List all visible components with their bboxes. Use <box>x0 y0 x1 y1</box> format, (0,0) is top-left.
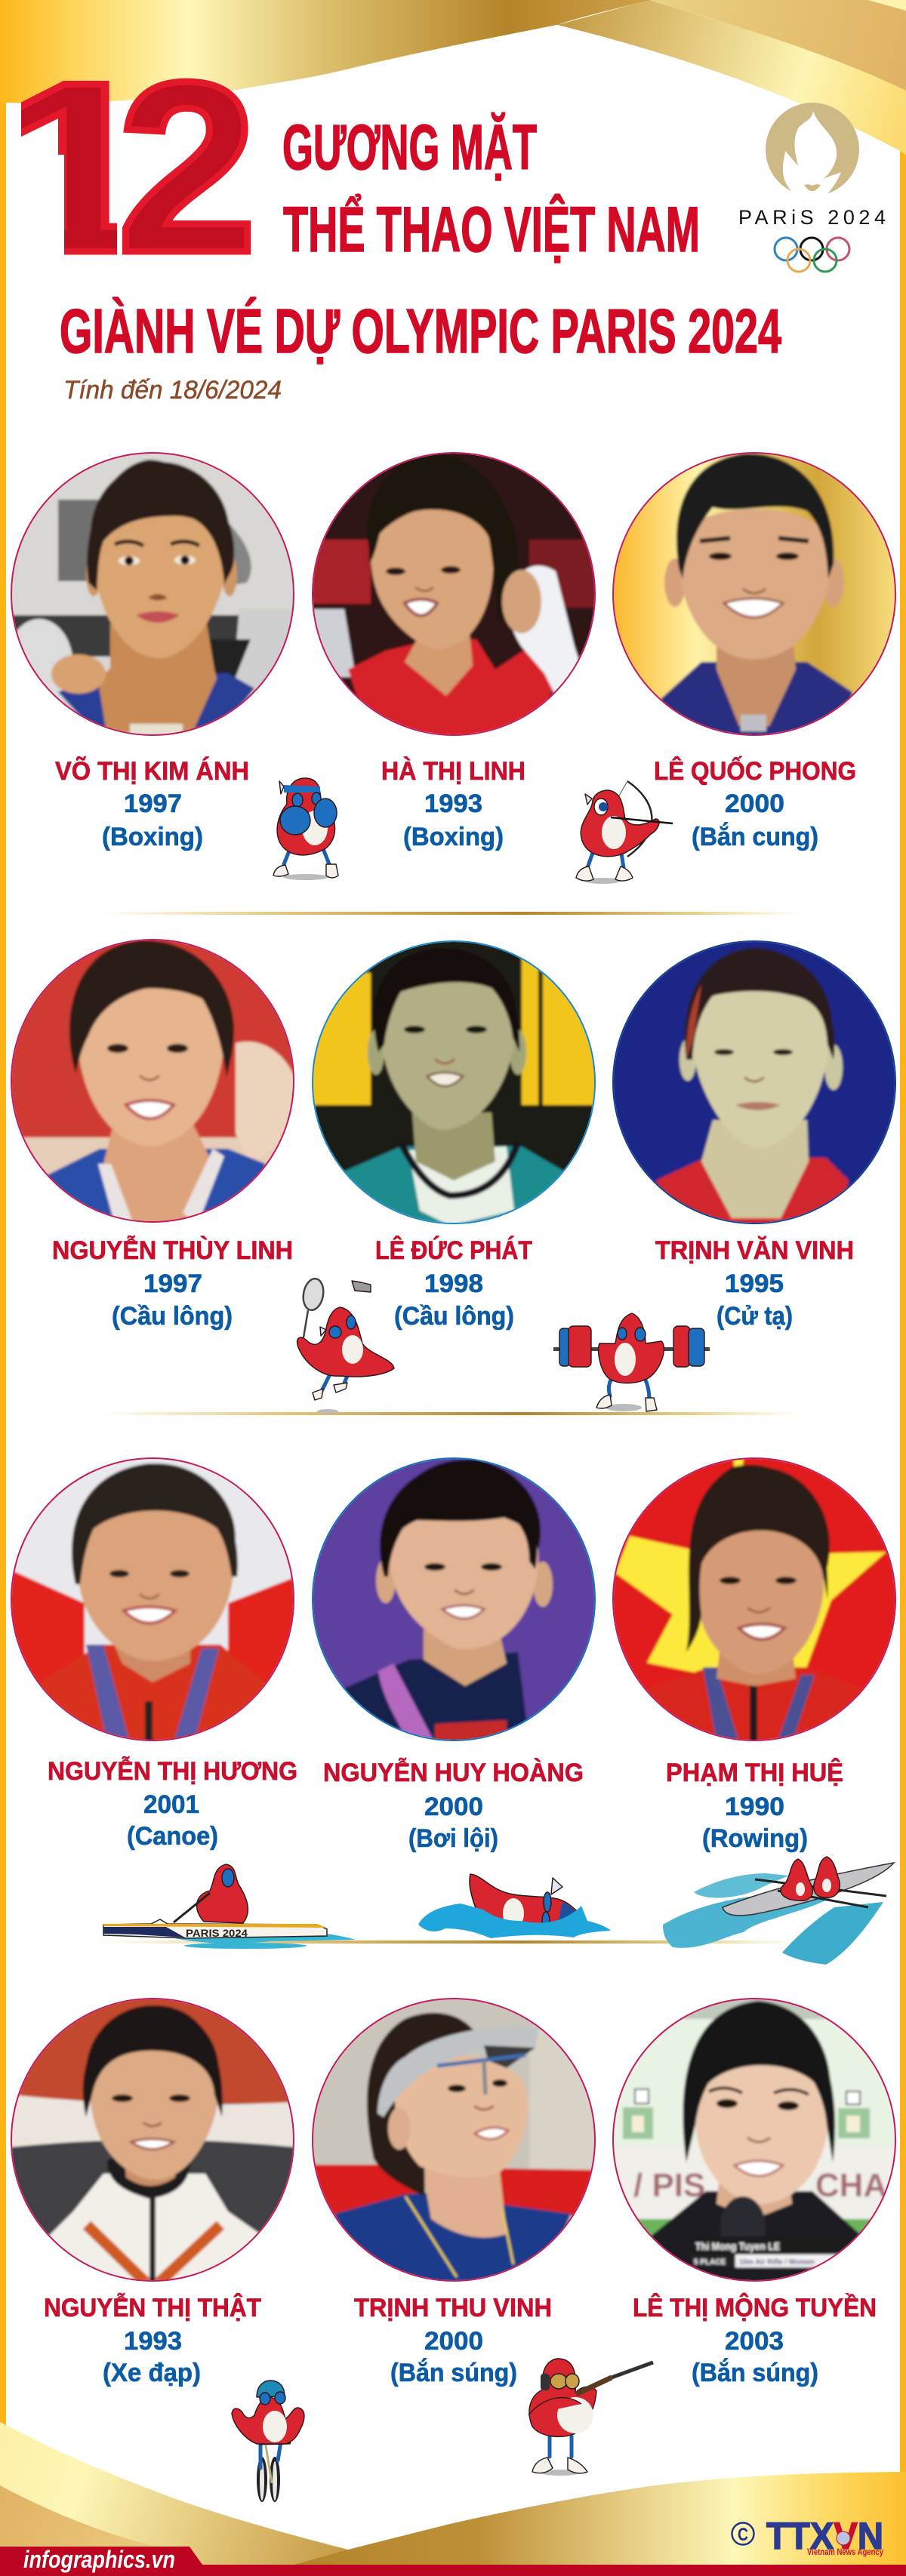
name 8: (Bơi lội) <box>408 1824 498 1853</box>
athlete photo: Võ Thị Kim Ánh <box>5 451 296 739</box>
name 8: NGUYỄN HUY HOÀNG <box>323 1759 584 1787</box>
name 3: LÊ QUỐC PHONG <box>654 756 856 786</box>
name 6 <box>655 1236 854 1331</box>
athlete photo: Lê Đức Phát <box>310 939 597 1226</box>
logo wordmark: PARiS 2024 <box>738 206 886 229</box>
athlete photo: Lê Quốc Phong <box>611 451 898 737</box>
name 11: 2000 <box>424 2327 483 2356</box>
name 5: LÊ ĐỨC PHÁT <box>375 1236 532 1265</box>
mascot: canoe <box>103 1864 356 1949</box>
mascot: boxing <box>273 778 338 880</box>
mascot: cycling <box>232 2381 304 2502</box>
name 9: 1990 <box>725 1793 784 1821</box>
name 6: 1995 <box>725 1270 784 1298</box>
athlete photo: Trịnh Thu Vinh <box>310 1996 597 2283</box>
athlete photo: Trịnh Văn Vinh <box>611 939 898 1226</box>
name 4: (Cầu lông) <box>112 1302 233 1331</box>
footer bar <box>0 2547 906 2576</box>
right gold edge <box>900 147 906 2476</box>
row 2 labels <box>52 1236 854 1331</box>
name 11: (Bắn súng) <box>390 2359 517 2387</box>
name 5 <box>375 1236 532 1331</box>
name 4 <box>52 1236 293 1331</box>
name 11: TRỊNH THU VINH <box>354 2294 552 2322</box>
name 1 <box>55 757 249 851</box>
athlete photo: Lê Thị Mộng Tuyền: 10m Air Rifle / Women <box>739 2258 815 2267</box>
copyright mark <box>732 2522 753 2545</box>
name 3: 2000 <box>725 789 784 818</box>
big number 12: 2 <box>117 32 257 303</box>
agency wordmark: TTXVN <box>766 2515 883 2557</box>
athlete photo: Nguyễn Thị Thật <box>9 1996 296 2283</box>
name 9 <box>666 1759 843 1853</box>
date note: Tính đến 18/6/2024 <box>63 376 282 405</box>
mascot: weightlifting <box>553 1313 710 1411</box>
boat lettering: PARIS 2024 <box>186 1927 248 1939</box>
left gold edge <box>0 98 6 2427</box>
agency tagline: Vietnam News Agency <box>807 2548 883 2557</box>
name 7: (Canoe) <box>127 1822 218 1851</box>
title block <box>21 78 782 399</box>
big number 12 <box>21 78 251 255</box>
name 1: VÕ THỊ KIM ÁNH <box>55 757 249 786</box>
athlete photo: Nguyễn Thùy Linh <box>9 937 296 1224</box>
name 2: 1993 <box>424 789 482 818</box>
athlete photo: Nguyễn Thị Hương <box>9 1456 296 1743</box>
Paris 2024 logo <box>738 103 886 272</box>
name 10: NGUYỄN THỊ THẬT <box>44 2294 261 2322</box>
name 12: 2003 <box>725 2327 784 2356</box>
copyright mark: C <box>738 2525 748 2545</box>
name 9: PHẠM THỊ HUỆ <box>666 1759 843 1787</box>
name 10 <box>44 2294 261 2387</box>
name 9: (Rowing) <box>702 1824 808 1853</box>
mascot: archery <box>576 781 673 884</box>
name 2: (Boxing) <box>403 823 504 851</box>
icon: olympic rings <box>775 238 849 272</box>
name 7 <box>48 1757 297 1851</box>
wall lettering: / PIS <box>633 2167 705 2204</box>
name 5: (Cầu lông) <box>394 1302 514 1331</box>
name 12: LÊ THỊ MỘNG TUYỀN <box>633 2293 877 2322</box>
name 8: 2000 <box>424 1793 483 1821</box>
athlete photo: Hà Thị Linh <box>310 451 597 737</box>
name 11 <box>354 2294 552 2387</box>
athlete photo: Lê Thị Mộng Tuyền <box>611 1996 898 2283</box>
name 12: (Bắn súng) <box>692 2359 818 2387</box>
name 4: 1997 <box>143 1270 202 1298</box>
name 3: (Bắn cung) <box>692 823 818 851</box>
name 7: 2001 <box>143 1790 199 1819</box>
row 4 labels <box>44 2293 877 2387</box>
heading line 1: GƯƠNG MẶT <box>282 112 537 183</box>
name 12 <box>633 2293 877 2387</box>
athlete photo: Phạm Thị Huệ <box>611 1456 898 1743</box>
bottom gold ribbon <box>0 2422 906 2565</box>
TTXVN logo <box>732 2515 883 2557</box>
name 7: NGUYỄN THỊ HƯƠNG <box>48 1757 297 1786</box>
icon: globe <box>837 2531 850 2545</box>
top gold ribbon <box>0 0 906 155</box>
name 5: 1998 <box>424 1270 483 1298</box>
mascot: swimming <box>418 1874 611 1938</box>
name 4: NGUYỄN THÙY LINH <box>52 1236 293 1265</box>
name 6: (Cử tạ) <box>716 1302 793 1331</box>
footer site name: infographics.vn <box>23 2546 175 2573</box>
row 1 labels <box>55 756 856 851</box>
name 2 <box>381 757 525 851</box>
name 1: 1997 <box>124 789 182 818</box>
name 10: (Xe đạp) <box>103 2359 201 2387</box>
name 1: (Boxing) <box>102 823 203 851</box>
mascot: badminton <box>297 1277 394 1414</box>
name 10: 1993 <box>124 2327 182 2356</box>
caption in photo: Thi Mong Tuyen LE <box>695 2240 780 2252</box>
athlete photo: Lê Thị Mộng Tuyền: CHA <box>815 2167 887 2204</box>
name 8 <box>323 1759 584 1853</box>
row 3 labels <box>48 1757 843 1853</box>
mascot: shooting <box>528 2359 653 2476</box>
athlete photo: Nguyễn Huy Hoàng <box>310 1456 597 1743</box>
name 6: TRỊNH VĂN VINH <box>655 1236 854 1265</box>
icon: flame emblem <box>766 103 859 198</box>
mascot: rowing <box>663 1857 894 1965</box>
athlete photo: Lê Thị Mộng Tuyền: 5 PLACE <box>694 2258 726 2267</box>
name 3 <box>654 756 856 851</box>
name 2: HÀ THỊ LINH <box>381 757 525 786</box>
